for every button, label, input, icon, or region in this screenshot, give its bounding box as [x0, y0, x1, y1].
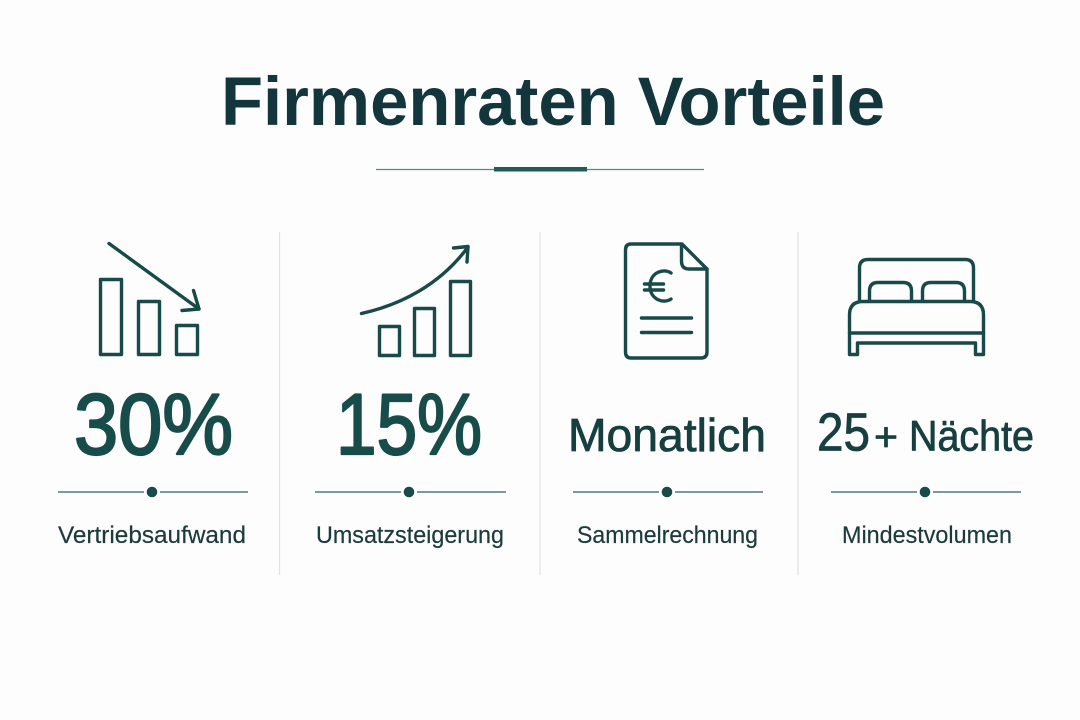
icon: double bed	[850, 260, 984, 354]
label: Vertriebsaufwand	[58, 522, 246, 549]
stat: 25+ Nächte: 25	[817, 402, 870, 462]
panel: Umsatzsteigerung	[315, 246, 506, 549]
title underline	[376, 167, 704, 172]
stat: 30%: 30%	[74, 377, 233, 473]
label: Sammelrechnung	[577, 522, 758, 549]
title: Firmenraten Vorteile	[221, 63, 885, 140]
panel: Sammelrechnung	[568, 244, 766, 549]
divider with dot	[315, 487, 506, 497]
divider with dot	[573, 487, 763, 497]
stat: Monatlich: Monatlich	[568, 409, 766, 461]
panel: Vertriebsaufwand	[58, 244, 248, 549]
divider with dot	[831, 487, 1021, 497]
label: Umsatzsteigerung	[316, 522, 504, 549]
panel: Mindestvolumen	[817, 260, 1034, 549]
icon: falling bar chart	[100, 244, 199, 354]
icon: euro invoice	[626, 244, 707, 358]
stat: 25+ Nächte: Nächte	[909, 412, 1034, 460]
stat: 25+ Nächte: +	[874, 416, 898, 460]
label: Mindestvolumen	[842, 522, 1012, 549]
icon: rising bar chart	[362, 246, 470, 356]
divider with dot	[58, 487, 248, 497]
stat: 15%: 15%	[336, 377, 482, 473]
